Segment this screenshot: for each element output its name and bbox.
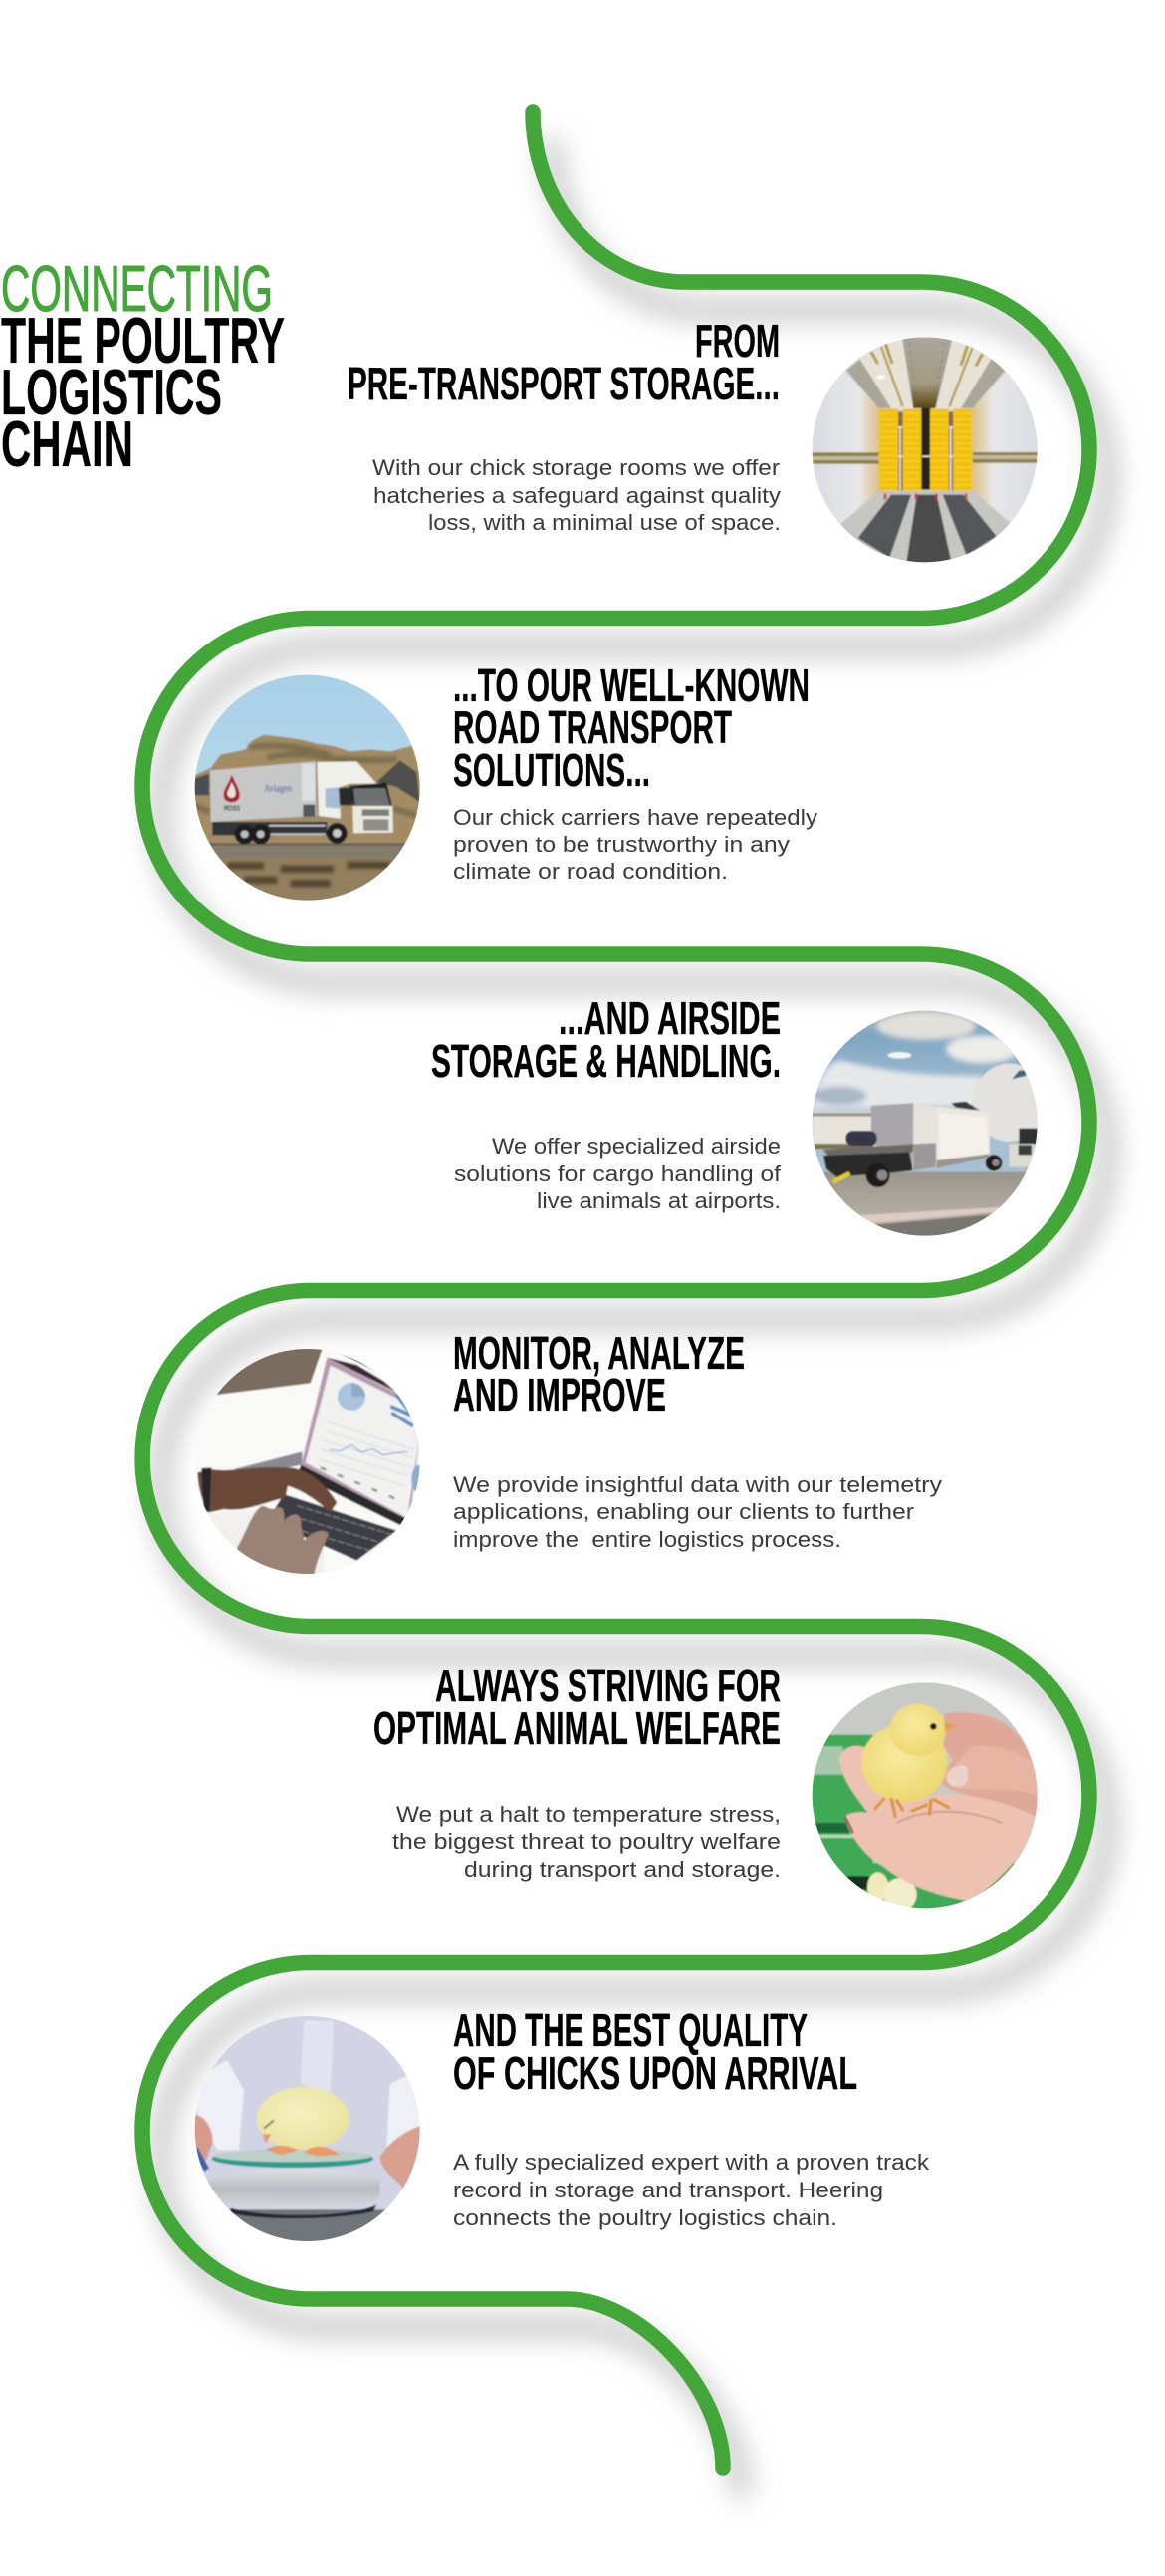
text block: We provide insightful data with our telemetry — [453, 1472, 943, 1497]
title: CHAIN — [1, 408, 133, 480]
heading: ROAD TRANSPORT — [453, 701, 732, 753]
text block: improve the entire logistics process. — [453, 1527, 841, 1552]
heading: OF CHICKS UPON ARRIVAL — [453, 2047, 857, 2099]
text block: We put a halt to temperature stress, — [396, 1802, 781, 1827]
text block: We offer specialized airside — [492, 1134, 781, 1159]
heading — [453, 659, 810, 796]
panel: road transport — [191, 659, 818, 904]
text block: With our chick storage rooms we offer — [372, 455, 781, 480]
photo: truck on road: ROSS — [224, 804, 240, 813]
panel: animal welfare — [373, 1660, 1043, 1913]
heading: FROM — [695, 315, 780, 367]
text block: record in storage and transport. Heering — [453, 2178, 883, 2202]
panel: airside storage and handling — [431, 992, 1045, 1242]
photo: truck on road: Aviagen — [264, 783, 292, 794]
heading — [453, 1327, 745, 1420]
title: LOGISTICS — [1, 357, 222, 428]
text block: applications, enabling our clients to further — [453, 1499, 915, 1524]
text block: proven to be trustworthy in any — [453, 832, 791, 857]
photo: airside vehicle — [810, 1009, 1045, 1242]
text block — [453, 805, 818, 884]
title: THE POULTRY — [1, 305, 285, 377]
photo: truck on road — [191, 672, 426, 904]
heading — [348, 315, 780, 409]
green chain line — [142, 112, 1089, 2468]
text block — [392, 1802, 781, 1882]
text block — [453, 2150, 930, 2230]
text block: live animals at airports. — [537, 1188, 781, 1213]
text block — [453, 1472, 943, 1552]
title — [1, 253, 285, 480]
text block: A fully specialized expert with a proven track — [453, 2150, 930, 2175]
heading: OPTIMAL ANIMAL WELFARE — [373, 1702, 781, 1754]
heading — [431, 992, 781, 1087]
heading: PRE-TRANSPORT STORAGE... — [348, 358, 780, 409]
text block — [372, 455, 782, 535]
text block: hatcheries a safeguard against quality — [373, 483, 782, 508]
text block: climate or road condition. — [453, 859, 728, 884]
heading: ...AND AIRSIDE — [559, 992, 781, 1044]
chain line shadow — [160, 139, 1107, 2496]
photo: chick in hands — [810, 1680, 1043, 1913]
heading: SOLUTIONS... — [453, 744, 650, 796]
heading: ALWAYS STRIVING FOR — [435, 1660, 781, 1711]
panel: monitor and analyze — [191, 1327, 943, 1581]
panel: pre-transport storage — [348, 315, 1043, 568]
text block: solutions for cargo handling of — [454, 1161, 782, 1186]
title: CONNECTING — [1, 253, 273, 325]
text block: the biggest threat to poultry welfare — [392, 1829, 781, 1854]
heading: AND THE BEST QUALITY — [453, 2004, 808, 2056]
text block: during transport and storage. — [464, 1857, 781, 1882]
text block: loss, with a minimal use of space. — [428, 510, 781, 535]
photo: chick on scale — [191, 2014, 426, 2246]
heading: AND IMPROVE — [453, 1369, 666, 1420]
photo: chick storage room — [810, 336, 1043, 568]
photo: laptop with charts — [196, 1349, 420, 1574]
text block: Our chick carriers have repeatedly — [453, 805, 818, 830]
heading: STORAGE & HANDLING. — [431, 1035, 781, 1087]
heading: MONITOR, ANALYZE — [453, 1327, 745, 1379]
heading: ...TO OUR WELL-KNOWN — [453, 659, 810, 711]
heading — [373, 1660, 781, 1754]
panel: best quality on arrival — [191, 2004, 930, 2246]
heading — [453, 2004, 857, 2099]
text block: connects the poultry logistics chain. — [453, 2205, 837, 2230]
text block — [454, 1134, 782, 1213]
